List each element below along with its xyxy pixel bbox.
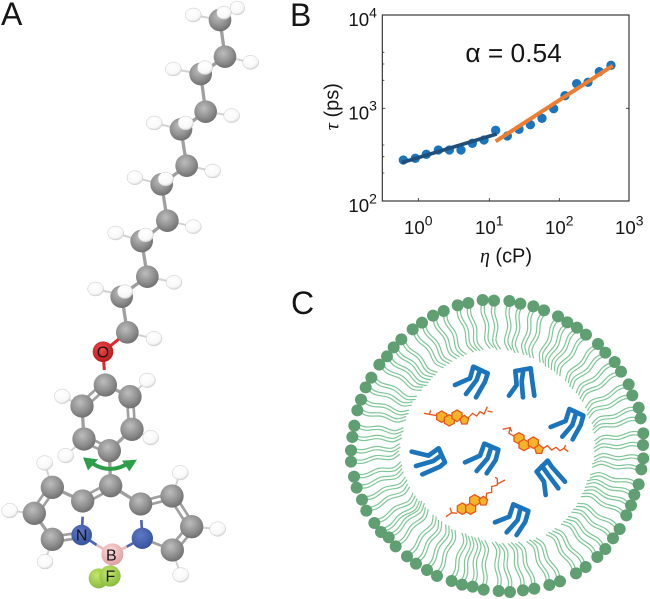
panel C: liposome with dye and lipid molecules [344,293,650,599]
y tick labels: 10 [348,9,369,30]
data points [399,61,616,165]
C-H bonds [10,8,251,575]
heteroatom bonds [103,332,127,370]
orange steroid dye molecules [424,407,568,517]
x tick labels: 0 [425,212,433,228]
oxygen atom [93,341,113,362]
panel B: log-log chart of lifetime vs viscosity [322,4,644,267]
y tick labels [348,4,377,216]
plot frame [382,15,629,201]
blue three-tailed lipids [412,367,583,535]
boron atom: B [106,547,117,564]
y tick labels: 10 [348,102,369,123]
nitrogen atom, labelled [71,525,92,545]
panel A: BODIPY molecular rotor ball-and-stick model [2,1,259,588]
panel label C: C [291,285,314,321]
alpha annotation: α = 0.54 [465,38,562,68]
x tick labels: 2 [566,212,574,228]
x tick labels [404,212,644,238]
y axis title: τ (ps) [322,83,344,130]
x axis title: η (cP) [480,245,532,267]
nitrogen atom [132,528,153,549]
x tick labels: 3 [636,212,644,228]
fluorine atoms [89,565,121,588]
nitrogen atom, labelled: N [76,528,87,545]
green rotation arrow [83,457,137,471]
x tick labels: 1 [496,212,504,228]
axis ticks [382,52,629,201]
lipid bilayer ring [344,293,650,599]
x tick labels: 10 [404,217,425,238]
y tick labels: 3 [369,98,377,114]
carbon backbone bonds [34,20,225,539]
orange fit line [496,66,613,141]
x tick labels: 10 [475,217,496,238]
carbon atoms [23,9,236,562]
hydrogen atoms [2,1,259,582]
y tick labels: 10 [348,195,369,216]
y tick labels: 2 [369,190,377,206]
oxygen atom: O [97,344,109,361]
fluorine atoms: F [105,569,115,586]
dark fit line [402,134,497,163]
boron atom [101,543,123,565]
x tick labels: 10 [615,217,636,238]
x tick labels: 10 [545,217,566,238]
aromatic double bonds [32,383,194,552]
y tick labels: 4 [369,4,377,20]
